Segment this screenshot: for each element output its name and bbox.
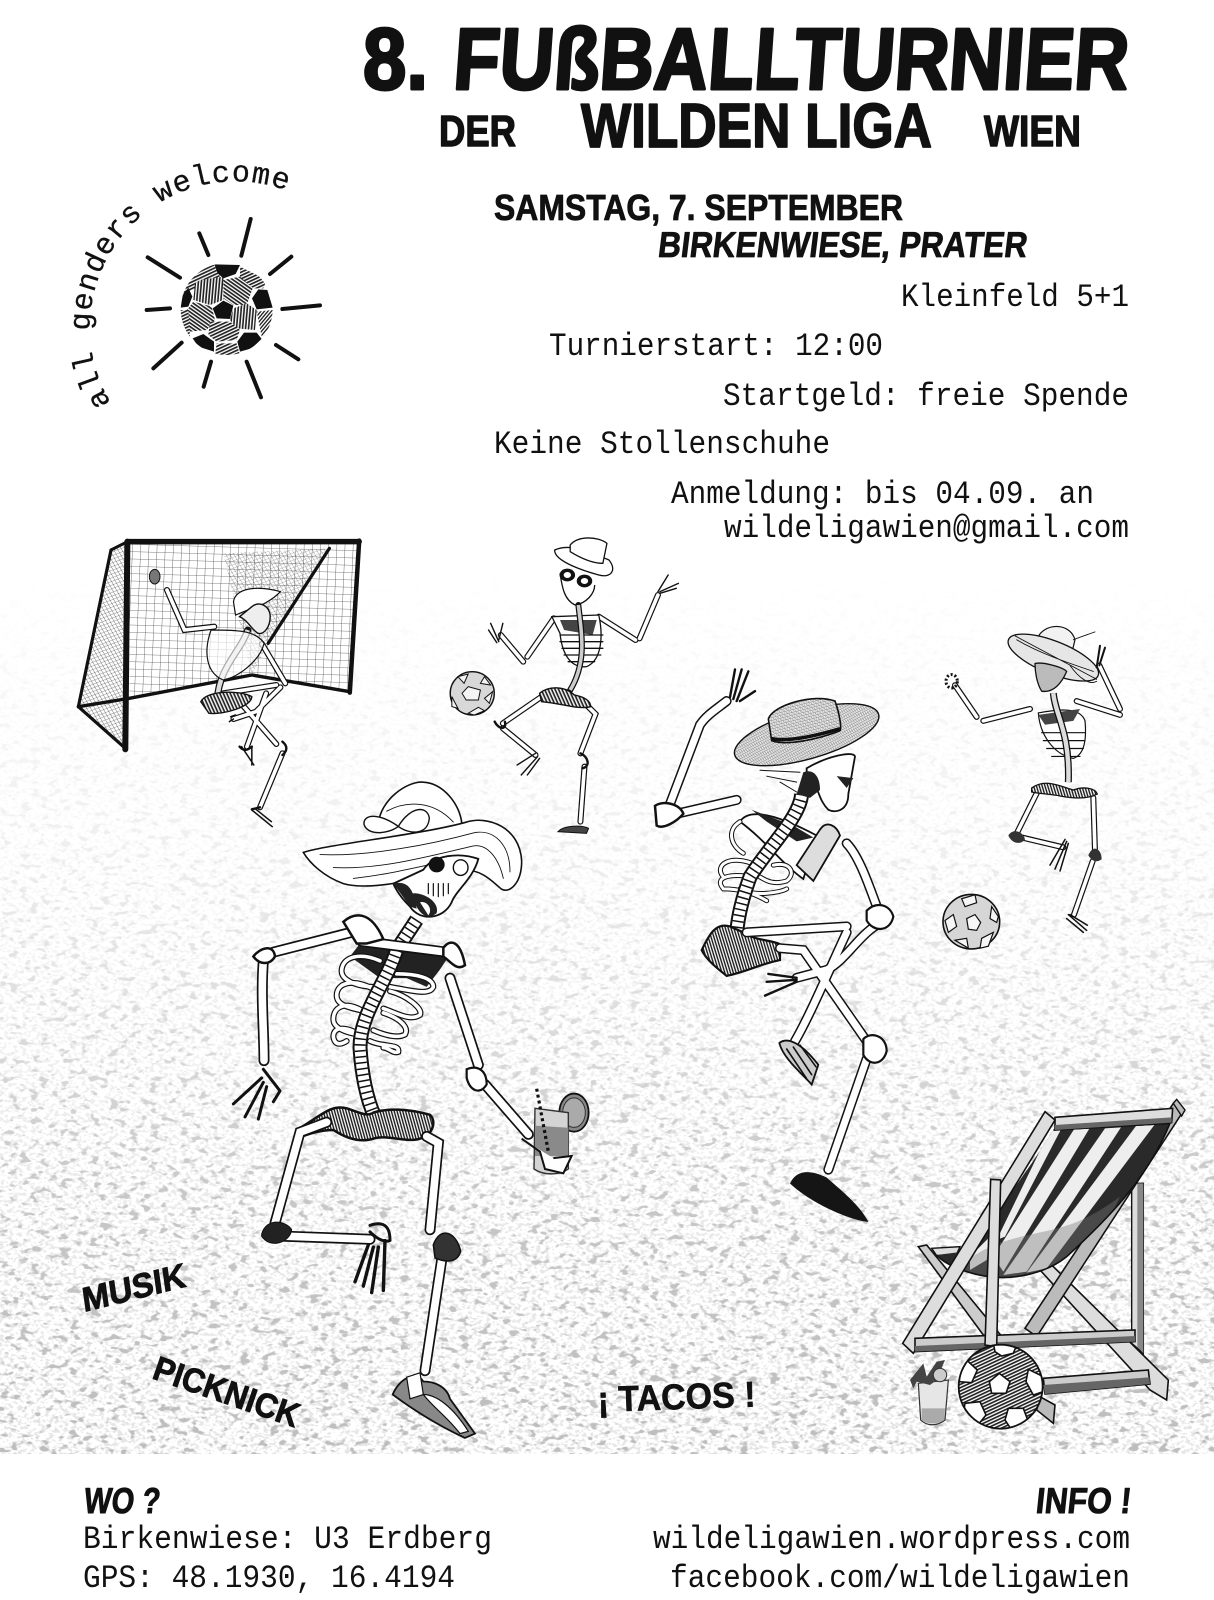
goalkeeper skeleton — [149, 569, 286, 827]
badge: all genders welcome — [72, 163, 322, 407]
footer: Wo: Birkenwiese: U3 Erdberg — [83, 1521, 492, 1558]
net back — [129, 542, 359, 698]
goal with net — [78, 541, 359, 749]
pelvis — [702, 926, 780, 976]
skeleton with small hat and glasses — [489, 538, 678, 833]
skull — [807, 754, 855, 811]
black boot — [790, 1172, 868, 1222]
hat — [555, 547, 613, 576]
hands and feet — [489, 575, 678, 775]
shoe — [393, 1376, 475, 1438]
date and place — [494, 187, 1030, 265]
lower bar — [1043, 1370, 1150, 1394]
label: Musik: MUSIK — [80, 1256, 188, 1320]
deck chair with ball and drink — [903, 1099, 1185, 1433]
hat — [378, 782, 462, 824]
date and place: SAMSTAG, 7. SEPTEMBER — [494, 187, 903, 228]
subtitle: der wilden liga wien — [439, 92, 1081, 161]
subtitle: der wilden liga wien: WIEN — [984, 107, 1081, 156]
footer: Wo: GPS: 48.1930, 16.4194 — [83, 1560, 455, 1597]
date and place: BIRKENWIESE, PRATER — [656, 224, 1030, 265]
tournament details: wildeligawien@gmail.com — [724, 510, 1129, 547]
hatched ball — [960, 1346, 1042, 1428]
lower rail — [1040, 1263, 1168, 1400]
footer: Info: wildeligawien.wordpress.com — [653, 1521, 1130, 1558]
hat — [730, 691, 883, 778]
medium football — [943, 894, 1000, 949]
arc text: all genders welcome — [72, 163, 288, 407]
small football — [450, 672, 494, 715]
label: Tacos: ¡ TACOS ! — [597, 1374, 756, 1420]
skull — [393, 855, 478, 917]
tournament details: Turnierstart: 12:00 — [549, 328, 883, 365]
front bar — [915, 1330, 1135, 1352]
tournament details: Kleinfeld 5+1 — [901, 279, 1129, 316]
hands — [233, 1069, 390, 1241]
cocktail — [918, 1380, 948, 1425]
fingers — [730, 669, 797, 996]
big skeleton with wide hat and drink — [233, 782, 589, 1438]
right rail — [1025, 1103, 1184, 1337]
textured grass background — [0, 703, 1214, 1454]
goal frame — [78, 541, 359, 749]
left rail — [903, 1112, 1055, 1353]
footer: Wo — [82, 1480, 492, 1597]
subtitle: der wilden liga wien: WILDEN LIGA — [581, 92, 932, 161]
arm post — [985, 1179, 1001, 1347]
lower foot — [779, 1041, 818, 1085]
spine — [360, 920, 417, 1117]
icon: football sun — [147, 219, 320, 397]
back post — [1132, 1183, 1143, 1353]
footer: Info: INFO ! — [1034, 1480, 1133, 1521]
tournament details: Anmeldung: bis 04.09. an — [671, 476, 1094, 513]
pelvis — [297, 1107, 433, 1140]
canvas — [938, 1124, 1169, 1277]
footer: Info — [653, 1480, 1133, 1597]
label: Picknick: PICKNICK — [148, 1350, 305, 1435]
ribs and chest — [740, 814, 817, 879]
footer: Wo: WO ? — [82, 1480, 162, 1521]
subtitle: der wilden liga wien: DER — [439, 107, 516, 156]
skeleton with sun hat — [946, 624, 1120, 932]
drink — [559, 1094, 589, 1132]
tournament details: Keine Stollenschuhe — [494, 426, 830, 463]
torso — [552, 615, 601, 667]
tournament details: Startgeld: freie Spende — [723, 378, 1129, 415]
joints — [343, 915, 383, 943]
hat — [1037, 626, 1075, 654]
joints — [655, 803, 683, 827]
tournament details — [494, 279, 1129, 547]
cross rail — [918, 1245, 1003, 1338]
footer: Info: facebook.com/wildeligawien — [670, 1560, 1130, 1597]
chest shadow — [350, 943, 450, 987]
title: 8. Fussballturnier: 8. — [363, 11, 428, 108]
spine — [736, 794, 802, 968]
kicking skeleton with straw hat — [655, 669, 893, 1222]
top bar — [1055, 1108, 1173, 1130]
